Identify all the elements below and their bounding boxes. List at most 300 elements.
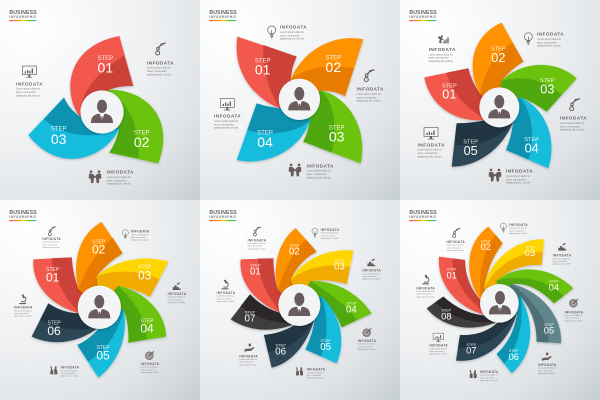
info block bottom: INFODATA <box>480 370 499 374</box>
petal: step 05: STEP <box>544 323 554 327</box>
info block lower left: Lorem ipsum dolor sit <box>429 347 447 350</box>
info block left: INFODATA <box>418 142 445 147</box>
petal: step 07: 07 <box>466 346 477 356</box>
petal: step 06 <box>264 305 315 368</box>
info block lower right: amet, consectetur <box>538 369 553 372</box>
petal: step 02: STEP <box>325 55 341 61</box>
info block left: Lorem ipsum dolor sit <box>416 290 434 293</box>
petal: step 04: STEP <box>549 280 559 284</box>
info block bottom <box>61 366 80 378</box>
info block bottom: Lorem ipsum dolor sit <box>107 176 131 179</box>
icon: binoculars <box>469 370 477 378</box>
info block left: adipiscing elit, sed do <box>14 315 31 318</box>
info block right <box>147 60 174 76</box>
petal: step 06: STEP <box>275 342 286 347</box>
info block right: amet, consectetur <box>168 298 183 301</box>
panel: three step diagram <box>0 0 200 200</box>
info block top: INFODATA <box>321 228 340 232</box>
info block top: adipiscing elit, sed do <box>321 237 338 240</box>
petal: step 05: STEP <box>463 139 478 145</box>
info block lower right: Lorem ipsum dolor sit <box>538 367 556 370</box>
info block right <box>565 310 584 322</box>
petal: step 02 <box>291 38 363 99</box>
icon: machine <box>173 282 181 290</box>
petal: step 06: STEP <box>509 349 519 353</box>
petal: step 04 <box>499 97 551 168</box>
info block bottom <box>107 170 134 186</box>
petal: step 04: 04 <box>346 304 357 315</box>
info block upper left: adipiscing elit, sed do <box>248 247 265 250</box>
center circle with person icon <box>479 87 519 127</box>
heading: INFOGRAPHIC <box>9 215 37 219</box>
info block right: adipiscing elit, sed do <box>357 100 381 103</box>
heading: INFOGRAPHIC <box>9 15 37 19</box>
info block bottom: Lorem ipsum dolor sit <box>61 369 79 372</box>
petal: step 04 <box>299 281 372 327</box>
info block left: adipiscing elit, sed do <box>418 155 442 158</box>
info block upper left: INFODATA <box>248 238 267 242</box>
info block lower right: INFODATA <box>358 339 377 343</box>
petal: step 07 <box>456 303 517 361</box>
petal: step 01: 01 <box>250 267 261 278</box>
petal: step 06 <box>32 303 102 342</box>
petal: step 04 <box>99 286 166 343</box>
petal: step 04: 04 <box>140 322 154 336</box>
info block right: amet, consectetur <box>560 125 580 128</box>
icon: bulb <box>122 230 128 239</box>
info block upper left: amet, consectetur <box>42 243 57 246</box>
petal: step 03: 03 <box>329 129 345 145</box>
info block upper right: Lorem ipsum dolor sit <box>362 272 380 275</box>
info block lower right: Lorem ipsum dolor sit <box>358 343 376 346</box>
icon: robot arm <box>156 43 166 55</box>
info block right: INFODATA <box>565 310 584 314</box>
info block lower right: adipiscing elit, sed do <box>358 348 375 351</box>
info block upper left: adipiscing elit, sed do <box>446 249 464 252</box>
heading: BUSINESS <box>209 210 237 216</box>
info block right: amet, consectetur <box>357 96 377 99</box>
info block top: INFODATA <box>537 32 564 37</box>
icon: microscope <box>19 294 26 304</box>
info block top: adipiscing elit, sed do <box>280 38 305 41</box>
petal: step 03: STEP <box>51 127 67 133</box>
petal: step 07: 07 <box>245 314 255 325</box>
petal: step 05: 05 <box>544 325 554 335</box>
info block left: amet, consectetur <box>416 293 431 296</box>
info block right: Lorem ipsum dolor sit <box>168 296 186 299</box>
petal: step 01 <box>33 257 99 313</box>
info block right <box>357 87 384 103</box>
center circle with person icon <box>80 90 124 134</box>
info block left <box>214 114 241 130</box>
center circle with person icon <box>480 284 519 323</box>
heading: INFOGRAPHIC <box>409 215 437 219</box>
info block top: adipiscing elit, sed do <box>537 45 562 48</box>
petal: step 01: STEP <box>250 262 261 267</box>
info block upper left: adipiscing elit, sed do <box>42 246 60 249</box>
heading <box>209 210 237 221</box>
heading <box>9 210 37 221</box>
petal: step 01: 01 <box>255 62 271 78</box>
info block top: Lorem ipsum dolor sit <box>321 232 339 235</box>
info block bottom <box>307 368 326 380</box>
info block top <box>537 32 564 48</box>
info block lower left: INFODATA <box>429 344 448 348</box>
info block upper left: INFODATA <box>446 240 465 244</box>
info block left: adipiscing elit, sed do <box>214 127 239 130</box>
petal: step 02: 02 <box>491 51 505 65</box>
info block right <box>168 292 187 304</box>
info block top: INFODATA <box>131 230 150 234</box>
info block right: INFODATA <box>147 60 174 65</box>
panel: four step diagram <box>200 0 400 200</box>
info block top: Lorem ipsum dolor sit <box>537 38 561 41</box>
center circle with person icon <box>78 286 121 329</box>
info block upper right: amet, consectetur <box>553 260 568 263</box>
info block top: amet, consectetur <box>509 229 524 232</box>
petal: step 01: STEP <box>442 83 457 89</box>
info block bottom: adipiscing elit, sed do <box>107 183 131 186</box>
info block left: INFODATA <box>16 81 43 86</box>
icon: target <box>362 328 371 337</box>
info block upper left: amet, consectetur <box>429 57 449 60</box>
petal: step 03: STEP <box>138 265 152 271</box>
petal: step 08 <box>427 297 500 328</box>
info block top <box>321 228 340 240</box>
icon: handshake <box>289 164 301 176</box>
info block left: Lorem ipsum dolor sit <box>418 149 442 152</box>
petal: step 02: STEP <box>134 131 150 137</box>
icon: hand <box>542 353 552 361</box>
info block lower right <box>538 363 557 375</box>
petal: step 03 <box>28 97 119 159</box>
info block bottom: adipiscing elit, sed do <box>480 379 497 382</box>
info block bottom: amet, consectetur <box>506 178 526 181</box>
info block upper left: INFODATA <box>42 237 61 241</box>
petal: step 06: 06 <box>275 347 286 358</box>
info block lower left: adipiscing elit, sed do <box>239 363 257 366</box>
info block left: adipiscing elit, sed do <box>16 94 41 97</box>
info block top: Lorem ipsum dolor sit <box>509 227 527 230</box>
info block lower right: adipiscing elit, sed do <box>538 372 555 375</box>
center circle with person icon <box>278 284 320 326</box>
petal: step 01: STEP <box>46 267 60 273</box>
info block lower left: amet, consectetur <box>429 350 444 353</box>
petal: step 01 <box>237 37 299 108</box>
info block upper left <box>429 47 456 63</box>
petal: step 04: STEP <box>140 318 154 324</box>
heading: BUSINESS <box>409 10 437 16</box>
info block upper left: adipiscing elit, sed do <box>429 60 453 63</box>
info block upper left: Lorem ipsum dolor sit <box>42 241 60 244</box>
icon: robot arm <box>570 99 580 111</box>
petal: step 04 <box>497 269 573 303</box>
info block right: Lorem ipsum dolor sit <box>147 67 171 70</box>
info block left: adipiscing elit, sed do <box>416 295 434 298</box>
petal: step 01: 01 <box>46 271 60 285</box>
info block bottom: Lorem ipsum dolor sit <box>506 175 530 178</box>
petal: step 06 <box>497 297 530 373</box>
info block bottom: INFODATA <box>61 366 80 370</box>
panel: six step diagram <box>0 200 200 400</box>
info block upper left: Lorem ipsum dolor sit <box>248 242 266 245</box>
petal: step 05 <box>299 297 341 363</box>
info block upper right: adipiscing elit, sed do <box>362 278 380 281</box>
info block bottom: INFODATA <box>307 368 326 372</box>
info block left: Lorem ipsum dolor sit <box>16 88 40 91</box>
icon: binoculars <box>50 366 57 374</box>
icon: bulb <box>312 228 318 237</box>
petal: step 01: 01 <box>442 87 456 101</box>
info block left: amet, consectetur <box>217 297 232 300</box>
info block bottom <box>307 163 334 179</box>
icon: monitor <box>433 333 444 342</box>
petal: step 02: 02 <box>92 243 106 257</box>
petal: step 01 <box>240 258 299 313</box>
info block right: Lorem ipsum dolor sit <box>560 122 584 125</box>
info block top: adipiscing elit, sed do <box>509 232 527 235</box>
petal: step 02 <box>102 90 163 163</box>
info block top: INFODATA <box>280 25 307 30</box>
petal: step 02: 02 <box>480 242 491 252</box>
icon: robot arm <box>253 227 261 236</box>
petal: step 01 <box>70 36 133 117</box>
petal: step 02 <box>76 222 123 307</box>
petal: step 04: STEP <box>257 131 273 137</box>
petal: step 03: 03 <box>334 262 345 273</box>
info block lower left: INFODATA <box>239 354 258 358</box>
info block upper right: INFODATA <box>362 269 381 273</box>
info block right: adipiscing elit, sed do <box>147 73 172 76</box>
petal: step 03: 03 <box>138 268 152 282</box>
info block bottom: adipiscing elit, sed do <box>307 377 324 380</box>
info block bottom: adipiscing elit, sed do <box>307 176 331 179</box>
petal: step 01: STEP <box>97 56 113 62</box>
heading: BUSINESS <box>409 210 437 216</box>
icon: machine <box>558 243 566 251</box>
info block top: Lorem ipsum dolor sit <box>131 233 149 236</box>
info block bottom: amet, consectetur <box>307 173 327 176</box>
heading: BUSINESS <box>9 10 37 16</box>
heading <box>409 10 437 21</box>
petal: step 03: STEP <box>334 258 345 263</box>
petal: step 05: 05 <box>464 144 478 158</box>
icon: robot arm <box>453 228 460 237</box>
petal: step 02 <box>473 23 523 107</box>
petal: step 04 <box>237 99 310 161</box>
info block top: Lorem ipsum dolor sit <box>280 31 304 34</box>
info block right: Lorem ipsum dolor sit <box>357 93 381 96</box>
info block left: Lorem ipsum dolor sit <box>217 295 235 298</box>
heading: BUSINESS <box>9 210 37 216</box>
petal: step 04: 04 <box>525 142 539 156</box>
heading: INFOGRAPHIC <box>209 215 237 219</box>
icon: hand <box>244 344 254 352</box>
info block left: INFODATA <box>14 306 33 310</box>
info block left: INFODATA <box>217 291 236 295</box>
heading <box>9 10 37 21</box>
info block right: adipiscing elit, sed do <box>565 319 582 322</box>
petal: step 07 <box>231 294 299 330</box>
heading <box>409 210 437 221</box>
info block left: Lorem ipsum dolor sit <box>214 120 238 123</box>
petal: step 04: 04 <box>549 282 559 292</box>
panel: seven step diagram <box>200 200 400 400</box>
petal: step 05: STEP <box>320 338 331 343</box>
petal: step 03 <box>97 258 168 307</box>
petal: step 02: STEP <box>289 242 300 247</box>
info block right: amet, consectetur <box>147 70 167 73</box>
petal: step 03: STEP <box>525 246 535 250</box>
petal: step 03 <box>484 239 544 303</box>
icon: robot arm <box>48 227 56 236</box>
info block bottom: Lorem ipsum dolor sit <box>307 170 331 173</box>
info block top: amet, consectetur <box>131 236 146 239</box>
info block top: amet, consectetur <box>537 41 557 44</box>
info block top <box>131 230 150 242</box>
petal: step 02: 02 <box>289 246 300 257</box>
info block upper left <box>446 240 465 252</box>
info block lower left: amet, consectetur <box>239 361 254 364</box>
info block bottom <box>506 169 533 185</box>
petal: step 03: STEP <box>540 78 555 84</box>
info block upper left: amet, consectetur <box>248 245 263 248</box>
info block upper right: amet, consectetur <box>362 275 377 278</box>
info block bottom <box>480 370 499 382</box>
info block top: adipiscing elit, sed do <box>131 239 148 242</box>
icon: target <box>569 299 578 308</box>
info block left: INFODATA <box>214 114 241 119</box>
info block bottom: INFODATA <box>107 170 134 175</box>
icon: target <box>145 351 154 360</box>
heading <box>209 10 237 21</box>
petal: step 05 <box>499 284 561 343</box>
info block left: amet, consectetur <box>418 152 438 155</box>
info block upper left: Lorem ipsum dolor sit <box>446 244 464 247</box>
info block right: INFODATA <box>560 116 587 121</box>
info block upper left <box>42 237 61 249</box>
info block right: adipiscing elit, sed do <box>560 129 585 132</box>
petal: step 03: 03 <box>525 248 535 258</box>
icon: robot arm <box>364 70 374 82</box>
info block lower left: adipiscing elit, sed do <box>429 353 447 356</box>
petal: step 08: STEP <box>442 309 452 313</box>
petal: step 05 <box>77 307 125 378</box>
info block upper left <box>248 238 267 250</box>
petal: step 03 <box>499 65 577 112</box>
petal: step 03 <box>291 250 353 305</box>
info block upper right <box>553 254 572 266</box>
info block left: amet, consectetur <box>214 123 234 126</box>
icon: machine <box>367 259 375 266</box>
info block bottom: Lorem ipsum dolor sit <box>480 374 498 377</box>
icon: binoculars <box>296 367 303 375</box>
info block right: Lorem ipsum dolor sit <box>565 314 583 317</box>
info block lower right <box>141 362 160 374</box>
icon: handshake <box>489 169 501 181</box>
info block bottom: adipiscing elit, sed do <box>506 182 531 185</box>
info block upper left: INFODATA <box>429 47 456 52</box>
icon: handshake <box>89 170 101 183</box>
petal: step 01: 01 <box>446 270 457 280</box>
petal: step 03: 03 <box>51 131 67 147</box>
petal: step 05 <box>452 107 513 167</box>
info block lower right: adipiscing elit, sed do <box>141 371 158 374</box>
petal: step 06: STEP <box>47 320 61 326</box>
info block lower right: amet, consectetur <box>358 345 373 348</box>
petal: step 06: 06 <box>508 352 519 362</box>
info block left <box>418 142 445 158</box>
petal: step 03 <box>299 91 362 163</box>
info block left: Lorem ipsum dolor sit <box>14 309 32 312</box>
info block top <box>509 223 528 235</box>
info block left: amet, consectetur <box>14 312 29 315</box>
info block right: amet, consectetur <box>565 317 580 320</box>
icon: chess and chart <box>438 35 449 43</box>
info block lower left <box>239 354 258 366</box>
petal: step 07: STEP <box>245 310 256 315</box>
petal: step 05: 05 <box>96 348 110 362</box>
info block upper right: INFODATA <box>553 254 572 258</box>
petal: step 02 <box>469 227 503 303</box>
info block bottom: Lorem ipsum dolor sit <box>307 371 325 374</box>
petal: step 02: STEP <box>481 239 491 243</box>
info block bottom: amet, consectetur <box>61 372 76 375</box>
petal: step 05: STEP <box>96 345 110 351</box>
info block lower left <box>429 344 448 356</box>
icon: microscope <box>222 280 228 289</box>
petal: step 01: STEP <box>255 58 271 64</box>
info block lower right <box>358 339 377 351</box>
petal: step 02: STEP <box>92 239 106 245</box>
info block upper left: amet, consectetur <box>446 246 461 249</box>
info block right: INFODATA <box>168 292 187 296</box>
info block left <box>416 286 435 298</box>
petal: step 02 <box>276 228 317 305</box>
info block top: amet, consectetur <box>321 234 336 237</box>
petal: step 04: STEP <box>346 300 357 305</box>
petal: step 01: STEP <box>447 268 457 272</box>
info block left: INFODATA <box>416 286 435 290</box>
petal: step 02: 02 <box>134 134 150 150</box>
petal: step 01: 01 <box>98 60 113 76</box>
info block right: adipiscing elit, sed do <box>168 301 185 304</box>
icon: monitor <box>424 128 438 139</box>
info block left <box>14 306 33 318</box>
heading: INFOGRAPHIC <box>209 15 237 19</box>
petal: step 03: 03 <box>540 82 554 96</box>
icon: bulb <box>500 223 506 232</box>
info block lower right: INFODATA <box>538 363 557 367</box>
info block lower right: INFODATA <box>141 362 160 366</box>
info block top: INFODATA <box>509 223 528 227</box>
info block left <box>217 291 236 303</box>
info block bottom: INFODATA <box>307 163 334 168</box>
petal: step 02: 02 <box>326 59 341 75</box>
info block upper right: adipiscing elit, sed do <box>553 263 570 266</box>
info block left: amet, consectetur <box>16 91 36 94</box>
info block right <box>560 116 587 132</box>
petal: step 03: STEP <box>329 125 345 131</box>
info block top: amet, consectetur <box>280 34 300 37</box>
info block top <box>280 25 307 41</box>
icon: bulb <box>268 26 276 38</box>
icon: microscope <box>422 275 429 284</box>
info block upper right: Lorem ipsum dolor sit <box>553 257 571 260</box>
icon: bulb <box>524 33 532 45</box>
info block upper left: Lorem ipsum dolor sit <box>429 53 453 56</box>
petal: step 06: 06 <box>47 324 61 338</box>
